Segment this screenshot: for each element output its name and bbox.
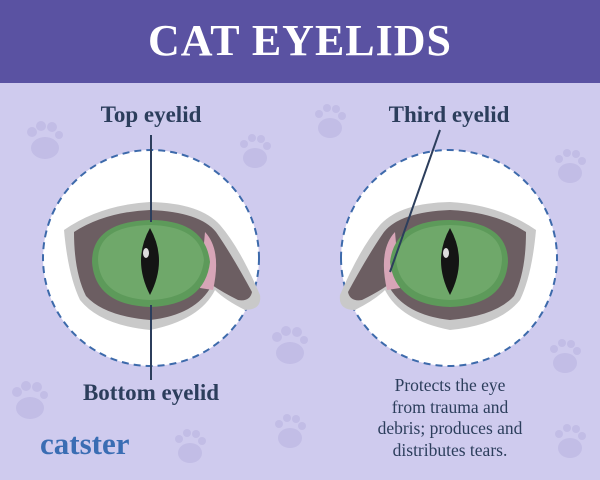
header [0,0,600,83]
title: CAT EYELIDS [148,16,452,65]
description: from trauma and [392,396,508,416]
pointer lines left [150,135,152,222]
logo: catster: catster [40,426,130,461]
description: debris; produces and [378,418,522,438]
label: third eyelid: Third eyelid [389,102,509,127]
label: top eyelid: Top eyelid [101,102,201,127]
description [378,375,522,460]
right eye illustration [340,130,558,367]
description: distributes tears. [393,440,507,460]
description: Protects the eye [395,375,505,395]
left eye illustration [42,149,260,367]
label: bottom eyelid: Bottom eyelid [83,380,219,405]
